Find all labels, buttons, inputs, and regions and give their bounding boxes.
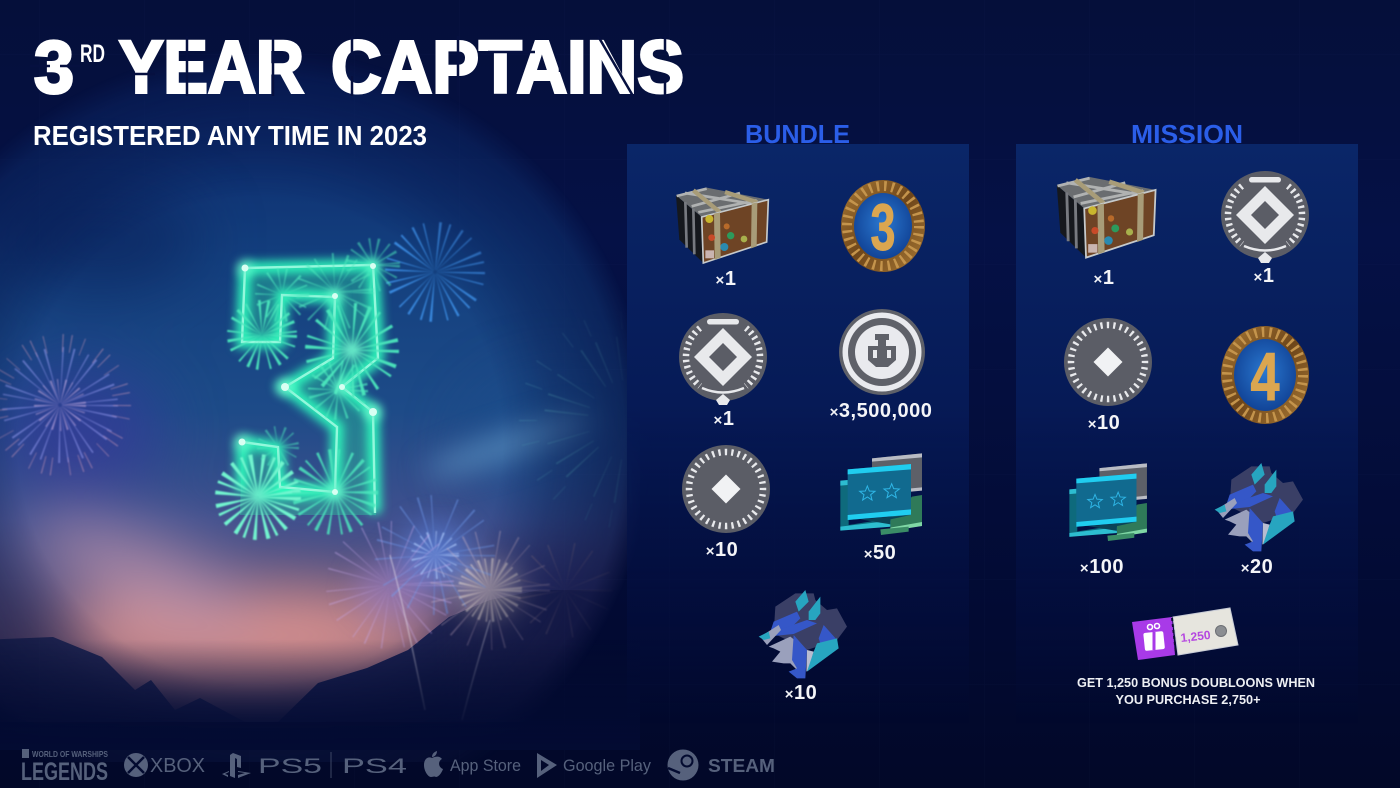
firework: blue top right xyxy=(409,246,461,298)
quantity: ×1 xyxy=(1094,267,1114,289)
cloud streak xyxy=(424,408,588,486)
quantity: ×10 xyxy=(1088,412,1120,434)
quantity: ×10 xyxy=(706,539,738,561)
panel: bundle xyxy=(627,119,969,724)
logo: legends: LEGENDS xyxy=(21,758,108,786)
icon: credits coin xyxy=(839,309,925,395)
quantity: ×1 xyxy=(1254,265,1274,287)
scene: night sky with fireworks xyxy=(0,50,728,762)
title xyxy=(30,26,684,108)
icon: container xyxy=(676,188,768,263)
logo: google play: Google Play xyxy=(563,756,651,775)
firework: purple left xyxy=(0,343,122,467)
icon: captain level 3 medal: 3 xyxy=(870,190,896,264)
logo: app store xyxy=(424,751,521,777)
title: YEAR xyxy=(119,26,304,108)
panel: mission xyxy=(1016,119,1358,724)
logo: playstation: PS5 xyxy=(258,755,322,778)
logo: playstation xyxy=(222,752,408,778)
icon: silver wreath xyxy=(679,313,767,405)
icon: signal flags xyxy=(1069,463,1147,541)
logo: google play xyxy=(537,753,651,778)
mountains xyxy=(0,590,588,762)
quantity: ×1 xyxy=(716,268,736,290)
logo: xbox: XBOX xyxy=(150,755,205,777)
glow and firework over the ridge xyxy=(355,525,522,620)
icon: container xyxy=(1057,177,1156,258)
firework: teal right xyxy=(520,322,620,519)
icon: camouflage xyxy=(1215,463,1303,551)
icon: bonus ticket: 1,250 xyxy=(1180,628,1212,645)
note: bonus doubloons xyxy=(1077,676,1315,707)
icon: captain level 4 medal xyxy=(1221,326,1309,424)
quantity: ×10 xyxy=(785,682,817,704)
logo: app store: App Store xyxy=(450,756,521,775)
logo: steam xyxy=(668,750,775,780)
heading: bundle: BUNDLE xyxy=(745,119,850,149)
quantity: ×100 xyxy=(1080,556,1124,578)
logo: legends: WORLD OF WARSHIPS xyxy=(32,749,108,759)
quantity: ×50 xyxy=(864,542,896,564)
icon: dashed token xyxy=(682,445,770,533)
heading: mission: MISSION xyxy=(1131,119,1243,149)
footer: platform logos xyxy=(21,749,775,786)
icon: captain level 4 medal: 4 xyxy=(1250,339,1280,415)
quantity: ×20 xyxy=(1241,556,1273,578)
icon: bonus ticket xyxy=(1132,608,1238,660)
logo: playstation: PS4 xyxy=(342,755,408,778)
note: bonus doubloons: YOU PURCHASE 2,750+ xyxy=(1116,693,1260,707)
quantity: ×1 xyxy=(714,408,734,430)
logo: steam: STEAM xyxy=(708,756,775,776)
logo: xbox xyxy=(124,753,205,777)
pink glow xyxy=(0,190,650,685)
title: RD xyxy=(80,40,105,68)
icon: signal flags xyxy=(840,453,922,535)
title: 3 xyxy=(34,26,74,108)
icon: captain level 3 medal xyxy=(841,180,925,272)
green number three xyxy=(235,251,387,519)
quantity: ×3,500,000 xyxy=(830,400,932,422)
title: CAPTAINS xyxy=(331,26,684,108)
icon: dashed token xyxy=(1064,318,1152,406)
note: bonus doubloons: GET 1,250 BONUS DOUBLOONS WHEN xyxy=(1077,676,1315,690)
icon: camouflage xyxy=(759,590,847,678)
icon: silver wreath xyxy=(1221,171,1309,263)
subtitle: REGISTERED ANY TIME IN 2023 xyxy=(33,120,427,151)
logo: legends xyxy=(21,749,108,786)
